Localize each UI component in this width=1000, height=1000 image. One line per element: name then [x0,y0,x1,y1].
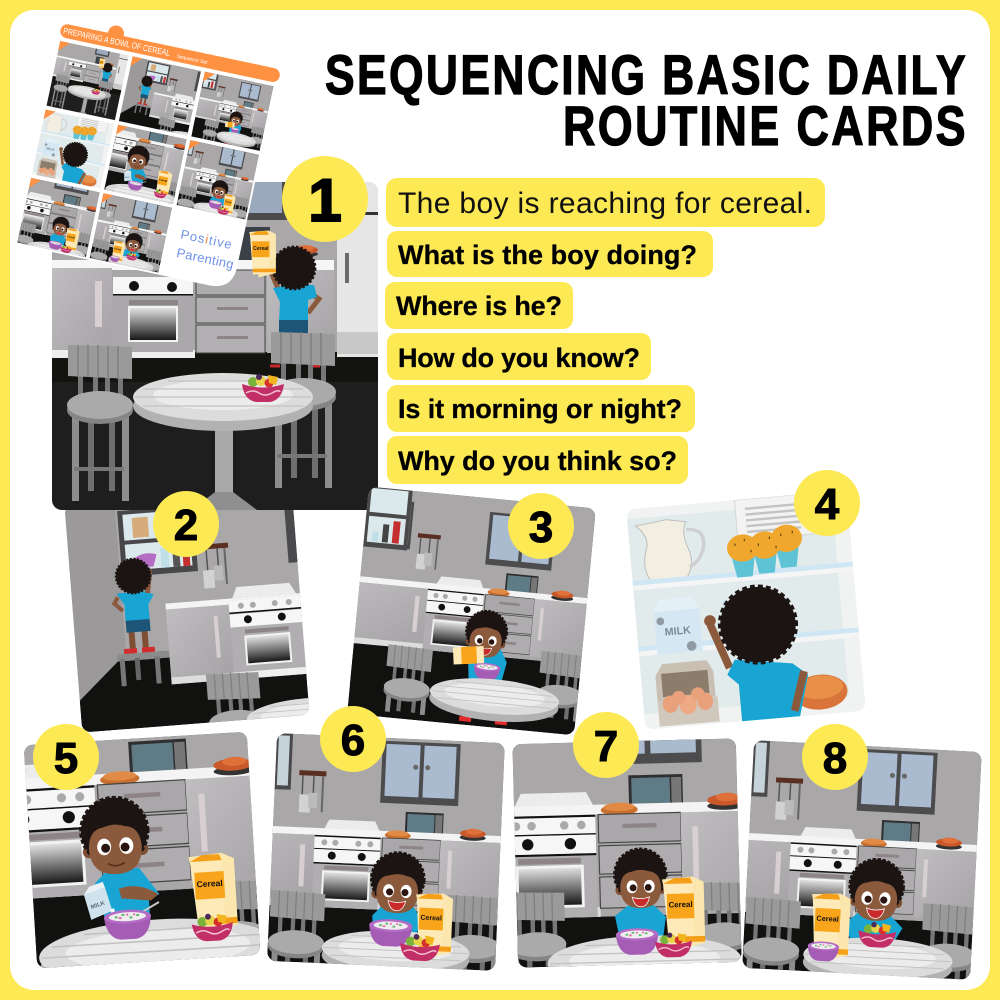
badge 7: 7 [594,722,618,771]
pill: why do you think so [387,436,688,484]
positive parenting logo: Parenting [175,245,235,272]
card 8: boy finishing breakfast [742,740,982,980]
sheet header [59,14,283,83]
badge 8 [802,724,868,790]
sheet header: Sequence Set [176,54,208,66]
badge 7 [573,712,639,778]
card 3: boy holding cereal box at table [348,487,596,735]
title [325,43,968,157]
badge 4 [794,470,860,536]
badge 3: 3 [529,503,553,552]
card 2: boy on stool reaching the cupboard [65,510,309,732]
pill: how do you know: How do you know? [398,343,640,373]
pill: what is the boy doing: What is the boy doing? [398,240,697,270]
pill: the boy is reaching for cereal: The boy is reaching for cereal. [398,187,812,220]
badge 5: 5 [54,734,78,783]
badge 2 [153,491,219,557]
badge 5 [33,724,99,790]
pill: why do you think so: Why do you think so? [398,446,677,476]
pill: the boy is reaching for cereal [386,178,825,227]
card 7: boy smiling at the table [512,738,742,968]
badge 3 [508,493,574,559]
positive parenting logo: Positive [179,226,233,252]
pill: how do you know [387,333,651,380]
card 6: boy eating cereal [268,734,504,970]
badge 8: 8 [823,734,847,783]
card 4: boy at open fridge [626,490,866,730]
badge 6: 6 [341,716,365,765]
pill: where is he: Where is he? [396,291,562,321]
card 1: boy reaching for cereal [52,180,378,510]
sheet header: PREPARING A BOWL OF CEREAL [62,26,171,58]
pill: where is he [385,282,573,329]
pill: is it morning or night: Is it morning or night? [398,394,682,424]
positive parenting logo [175,226,239,272]
badge 1 [282,156,368,242]
badge 6 [320,706,386,772]
preview sheet: preparing a bowl of cereal [0,3,283,301]
badge 2: 2 [174,501,198,550]
card 5: boy pouring milk [24,732,260,968]
pill: is it morning or night [387,385,695,432]
pill: what is the boy doing [387,231,713,277]
badge 1: 1 [308,167,342,234]
badge 4: 4 [815,480,840,529]
sheet thumbnails [0,11,279,300]
